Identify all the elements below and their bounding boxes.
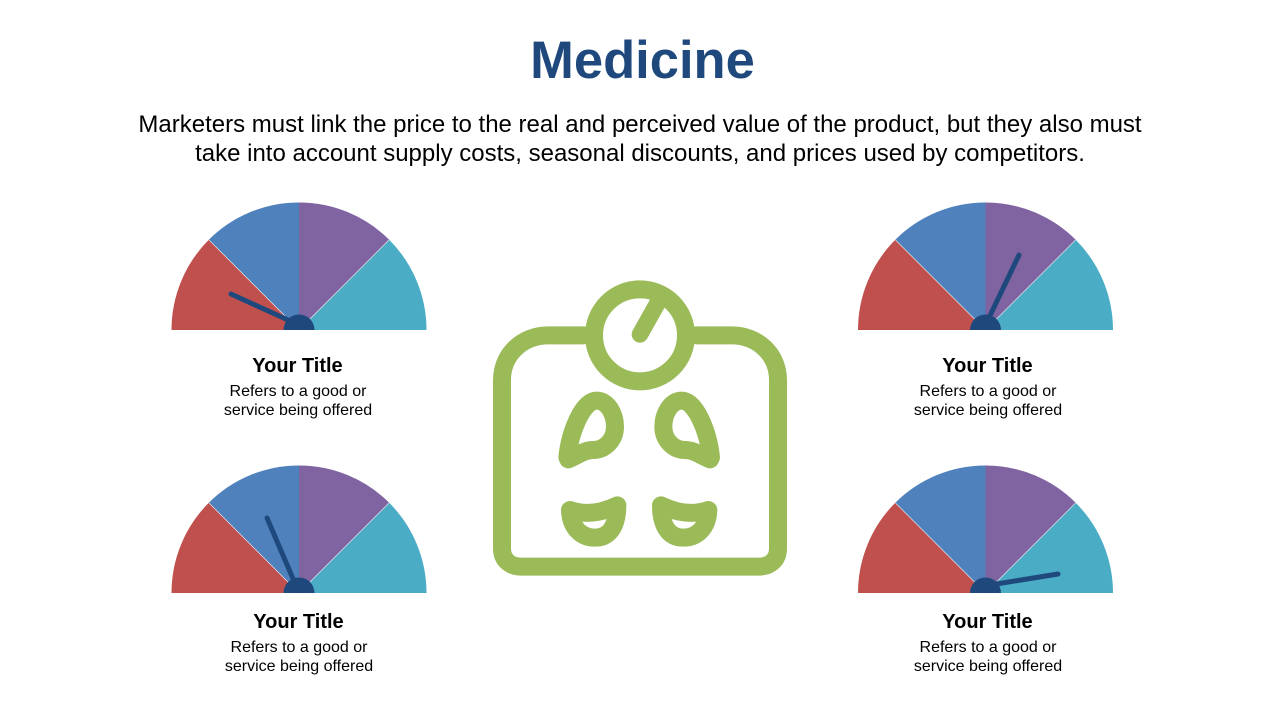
caption: bottom left: Your Title — [253, 611, 344, 633]
title: Medicine — [530, 31, 755, 90]
hub: bottom left — [284, 578, 314, 593]
needle: top right — [986, 255, 1019, 325]
caption: top right — [914, 355, 1062, 419]
caption: bottom right: Refers to a good or — [920, 639, 1057, 656]
hub: top right — [970, 314, 1001, 330]
intro text: take into account supply costs, seasonal discounts, and prices used by competitors. — [195, 140, 1085, 167]
footprint: lower right — [661, 505, 708, 538]
caption: bottom right: service being offered — [914, 658, 1062, 675]
caption: top left: service being offered — [224, 402, 372, 419]
caption: top left — [224, 355, 372, 419]
gauge: top right — [858, 202, 1113, 330]
needle: bottom left — [267, 518, 297, 588]
caption: bottom right: Your Title — [942, 611, 1033, 633]
gauge: top left — [171, 202, 427, 330]
caption: bottom right — [914, 611, 1062, 675]
caption: top left: Refers to a good or — [230, 383, 367, 400]
caption: bottom left — [225, 611, 373, 675]
footprint: upper right — [663, 401, 711, 459]
hub: top left — [284, 314, 314, 330]
gauge: bottom left — [171, 465, 427, 593]
dial pointer — [640, 302, 658, 334]
caption: bottom left: Refers to a good or — [231, 639, 368, 656]
footprint: upper left — [567, 401, 615, 459]
gauge: bottom right — [858, 465, 1113, 593]
intro text — [138, 111, 1142, 167]
caption: bottom left: service being offered — [225, 658, 373, 675]
scale dial — [594, 289, 686, 381]
caption: top right: Refers to a good or — [920, 383, 1057, 400]
caption: top left: Your Title — [252, 355, 343, 377]
caption: top right: Your Title — [942, 355, 1033, 377]
needle: top left — [231, 294, 299, 325]
icon: bathroom scale — [502, 289, 778, 567]
intro text: Marketers must link the price to the real and perceived value of the product, but they also must — [138, 111, 1142, 138]
footprint: lower left — [570, 505, 617, 538]
caption: top right: service being offered — [914, 402, 1062, 419]
hub: bottom right — [970, 578, 1001, 593]
needle: bottom right — [990, 574, 1058, 585]
scale body — [502, 335, 778, 567]
